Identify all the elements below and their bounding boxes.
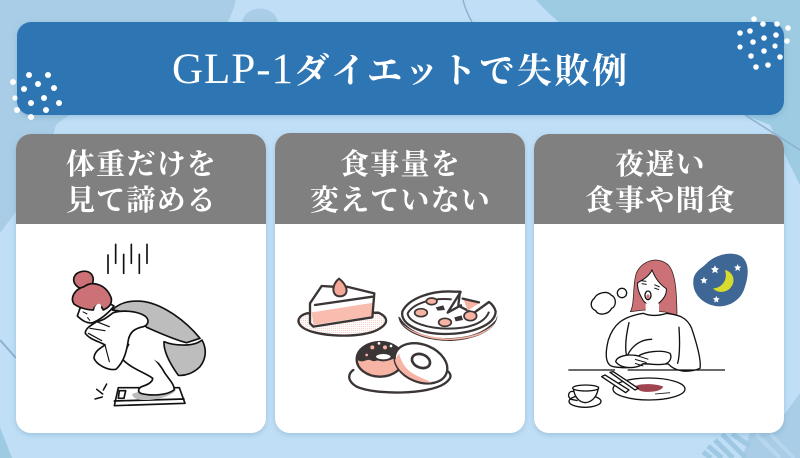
hair <box>72 284 111 310</box>
pizza <box>398 315 498 341</box>
panel: late meals and snacks <box>534 134 784 433</box>
pink donut <box>389 336 453 391</box>
panel heading: 夜遅い <box>615 148 706 181</box>
legs <box>122 342 174 395</box>
torso <box>128 327 165 363</box>
title text: GLP-1ダイエットで失敗例 <box>172 46 630 93</box>
icon: woman at table at night <box>568 254 748 407</box>
panel heading: 食事量を <box>340 148 461 181</box>
panel: weight only <box>16 134 266 433</box>
shorts <box>164 340 205 375</box>
hair <box>630 260 677 315</box>
chocolate donut <box>357 342 403 377</box>
panel: late meals and snacks: 食事や間食 <box>585 184 736 217</box>
icon: cake, pizza and donuts <box>299 279 498 393</box>
panel card <box>534 134 784 433</box>
face <box>638 270 666 305</box>
table <box>568 368 725 372</box>
sweater <box>606 313 700 371</box>
night bubble <box>693 254 748 306</box>
icon: woman crouching on scale <box>72 244 205 406</box>
cutlery <box>602 372 638 393</box>
face <box>77 298 114 323</box>
hair bun <box>74 271 93 289</box>
dress <box>112 301 200 343</box>
panel card <box>16 134 266 433</box>
panel card <box>275 133 525 433</box>
donut plate <box>349 370 451 393</box>
plate <box>613 378 685 400</box>
thought bubbles <box>591 293 615 314</box>
panel: unchanged food amount <box>275 133 525 433</box>
panel heading: 体重だけを <box>66 148 217 181</box>
panel header <box>534 134 784 224</box>
banner dots: right <box>737 16 791 70</box>
arm <box>85 311 148 370</box>
cake plate <box>299 313 386 336</box>
scale <box>114 388 185 406</box>
cake <box>310 286 374 327</box>
panel: weight only: 見て諦める <box>66 184 217 217</box>
panel header <box>275 133 525 224</box>
panel header <box>16 134 266 224</box>
title banner <box>10 16 791 120</box>
banner dots: left <box>10 72 62 120</box>
panel: unchanged food amount: 変えていない <box>310 184 491 217</box>
coffee cup <box>569 395 601 407</box>
gloom lines <box>108 244 147 273</box>
ear <box>94 304 101 312</box>
hands <box>616 351 671 368</box>
